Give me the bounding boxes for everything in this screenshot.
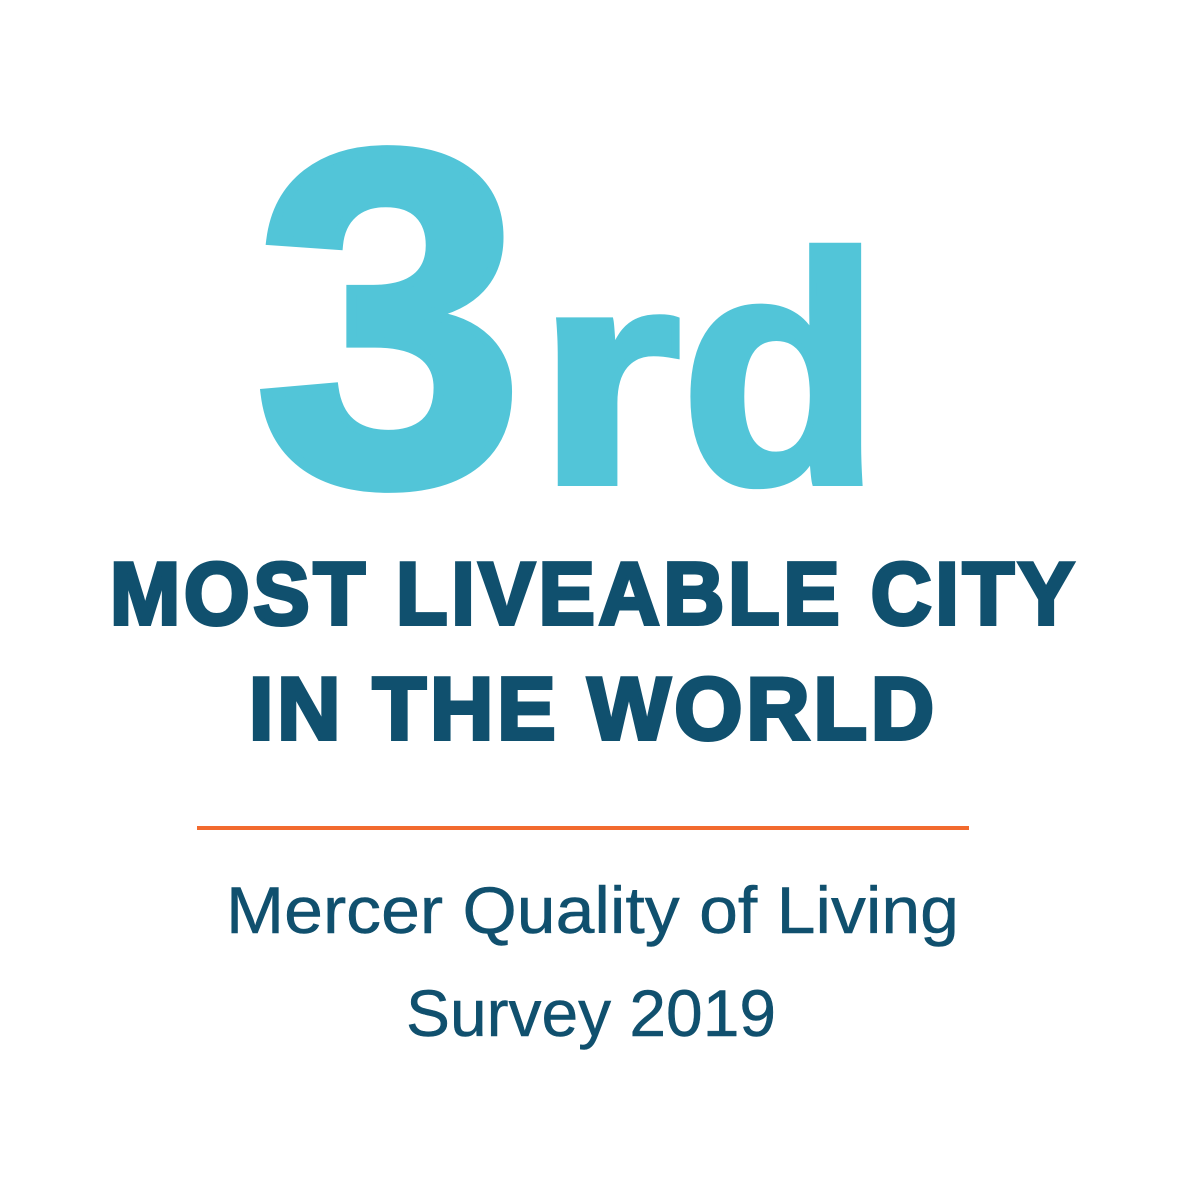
big rank number: 3: 3 [254,52,524,584]
source line 2: Survey 2019 [406,976,776,1050]
ordinal suffix: r: r [536,206,681,548]
orange divider [197,826,969,830]
heading line 2: IN THE WORLD [249,659,938,758]
source line 1: Mercer Quality of Living [226,873,959,947]
heading line 1: MOST LIVEABLE CITY [110,544,1078,643]
ordinal suffix: d: d [680,188,880,552]
